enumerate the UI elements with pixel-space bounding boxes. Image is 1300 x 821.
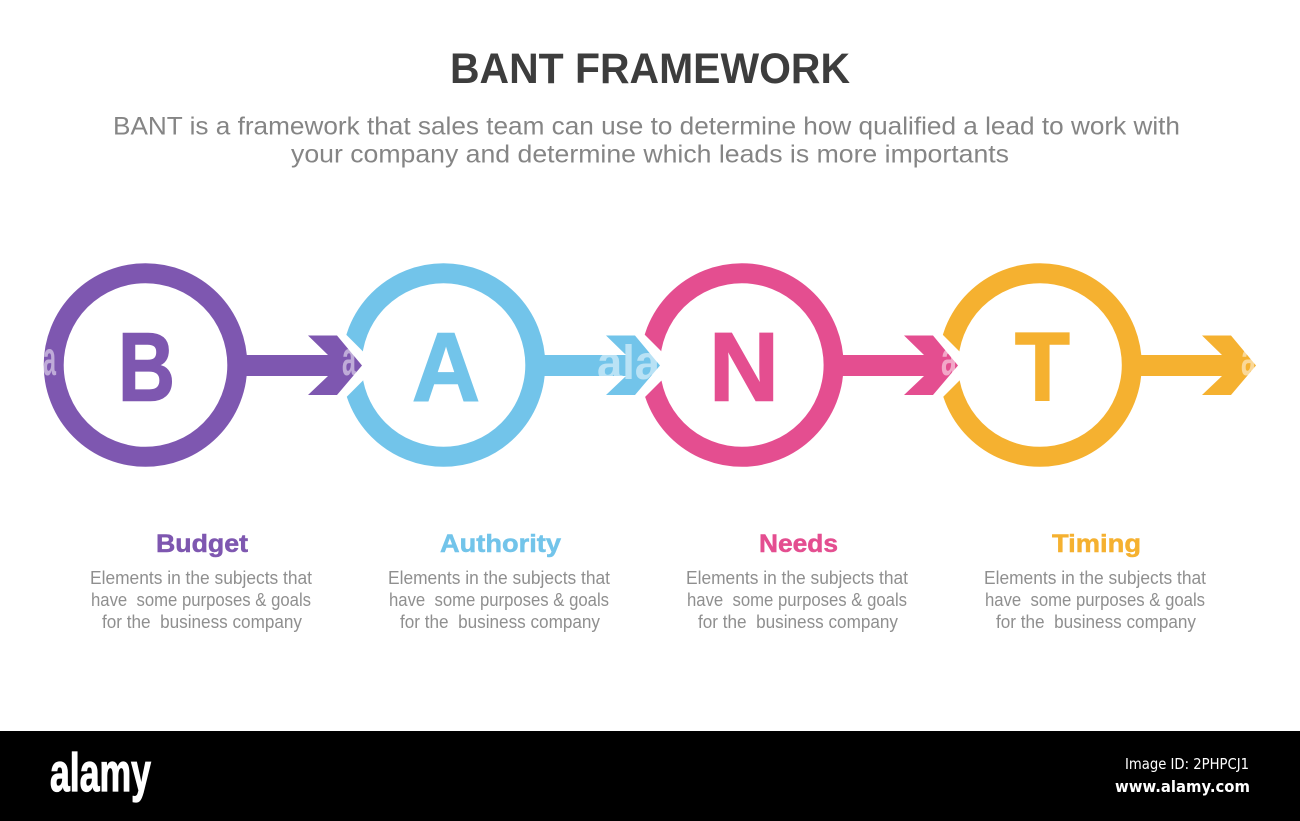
- label: Needs: [686, 530, 908, 632]
- step B: Budget circle and arrow: [54, 273, 362, 457]
- footer image id: Image ID: 2PHPCJ1: [1125, 755, 1249, 773]
- step A: Authority circle and arrow: [332, 273, 660, 457]
- label: Needs: have some purposes & goals: [687, 590, 907, 610]
- watermark fragments: a: [43, 333, 56, 386]
- step N: Needs circle and arrow: [630, 273, 958, 457]
- watermark fragments: a: [941, 333, 957, 386]
- step T: Timing circle and arrow: [928, 273, 1256, 457]
- label: Needs: for the business company: [698, 612, 898, 632]
- label: Authority: for the business company: [400, 612, 600, 632]
- step T: Timing circle and arrow: T: [1015, 312, 1070, 422]
- watermark fragments: [43, 333, 1256, 390]
- process diagram: [54, 273, 1256, 457]
- label: Budget: [90, 530, 312, 632]
- step B: Budget circle and arrow: B: [118, 312, 175, 422]
- label: Budget: Elements in the subjects that: [90, 568, 312, 588]
- step N: Needs circle and arrow: N: [709, 312, 779, 422]
- title: BANT FRAMEWORK: [450, 45, 850, 93]
- subtitle: [113, 112, 1180, 168]
- label: Needs: Elements in the subjects that: [686, 568, 908, 588]
- label: Budget: Budget: [156, 530, 249, 558]
- footer logo: alamy: [50, 743, 151, 803]
- watermark fragments: a: [342, 333, 356, 386]
- label: Timing: Elements in the subjects that: [984, 568, 1206, 588]
- step A: Authority circle and arrow: A: [412, 312, 480, 422]
- subtitle: your company and determine which leads is more importants: [291, 140, 1009, 168]
- label: Timing: have some purposes & goals: [985, 590, 1205, 610]
- footer url: www.alamy.com: [1115, 777, 1250, 796]
- label: Authority: [388, 530, 610, 632]
- label: Budget: have some purposes & goals: [91, 590, 311, 610]
- watermark fragments: a: [1241, 333, 1256, 386]
- label: Needs: Needs: [759, 530, 838, 558]
- label: Timing: Timing: [1052, 530, 1141, 558]
- footer bar: [0, 731, 1300, 821]
- watermark fragments: ala: [597, 337, 660, 390]
- label: Timing: for the business company: [996, 612, 1196, 632]
- subtitle: BANT is a framework that sales team can use to determine how qualified a lead to work with: [113, 112, 1180, 140]
- label: Authority: Elements in the subjects that: [388, 568, 610, 588]
- label: Budget: for the business company: [102, 612, 302, 632]
- label: Timing: [984, 530, 1206, 632]
- label: Authority: Authority: [440, 530, 561, 558]
- label: Authority: have some purposes & goals: [389, 590, 609, 610]
